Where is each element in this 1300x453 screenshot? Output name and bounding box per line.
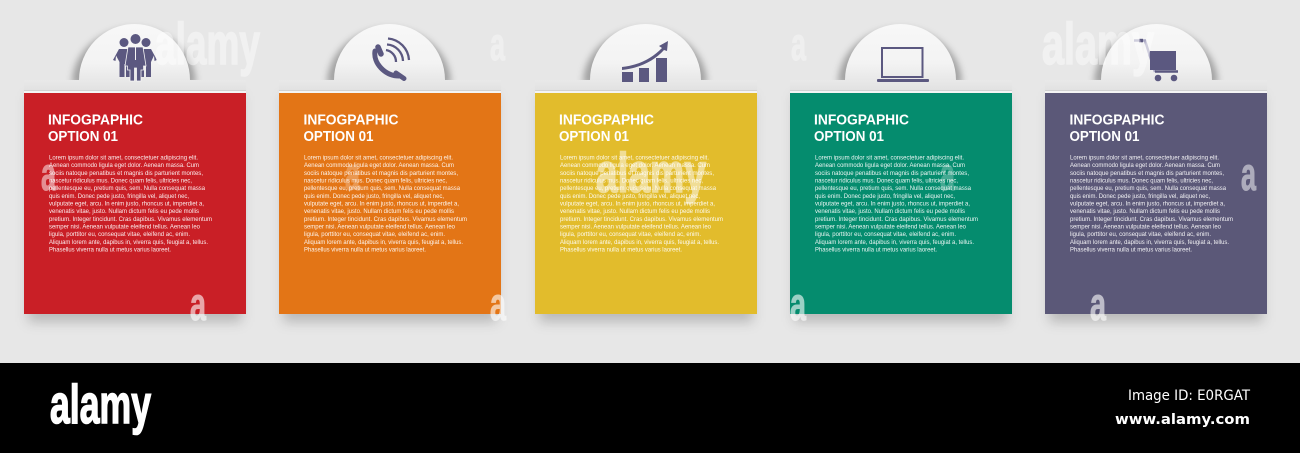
watermarks: a [490, 278, 506, 330]
body text: pellentesque eu, pretium quis, sem. Nulla consequat massa [49, 185, 205, 192]
body text: Phasellus viverra nulla ut metus varius laoreet. [560, 246, 682, 254]
body text: Aliquam lorem ante, dapibus in, viverra quis, feugiat a, tellus. [304, 239, 463, 246]
body text: venenatis vitae, justo. Nullam dictum felis eu pede mollis [304, 208, 455, 215]
body text: ligula, porttitor eu, consequat vitae, eleifend ac, enim. [815, 231, 956, 238]
body text: pellentesque eu, pretium quis, sem. Nulla consequat massa [815, 185, 971, 192]
body text: venenatis vitae, justo. Nullam dictum felis eu pede mollis [1070, 208, 1221, 215]
body text: vulputate eget, arcu. In enim justo, rhoncus ut, imperdiet a, [815, 200, 970, 208]
body text: sociis natoque penatibus et magnis dis parturient montes, [815, 170, 969, 177]
body text: vulputate eget, arcu. In enim justo, rhoncus ut, imperdiet a, [304, 200, 459, 208]
watermarks: a [345, 148, 360, 200]
body text: quis enim. Donec pede justo, fringilla vel, aliquet nec, [815, 193, 955, 200]
body text: semper nisi. Aenean vulputate eleifend tellus. Aenean leo [1070, 224, 1221, 230]
heading: OPTION 01 [559, 129, 629, 145]
heading: INFOGPAPHIC [1070, 112, 1165, 128]
heading: INFOGPAPHIC [814, 112, 910, 128]
heading: OPTION 01 [814, 129, 884, 145]
body text: quis enim. Donec pede justo, fringilla vel, aliquet nec, [49, 193, 189, 200]
heading: OPTION 01 [48, 129, 118, 145]
watermarks: a [41, 148, 56, 200]
body text [304, 154, 467, 254]
body text: Lorem ipsum dolor sit amet, consectetuer adipiscing elit. [49, 154, 198, 162]
body text: pretium. Integer tincidunt. Cras dapibus. Vivamus elementum [815, 216, 978, 223]
body text: ligula, porttitor eu, consequat vitae, eleifend ac, enim. [49, 231, 190, 238]
body text [815, 154, 978, 254]
body text: pellentesque eu, pretium quis, sem. Nulla consequat massa [304, 185, 460, 192]
body text: Lorem ipsum dolor sit amet, consectetuer adipiscing elit. [560, 154, 709, 162]
body text: nascetur ridiculus mus. Donec quam felis, ultricies nec, [560, 178, 703, 184]
body text: Phasellus viverra nulla ut metus varius laoreet. [304, 246, 426, 254]
body text: nascetur ridiculus mus. Donec quam felis, ultricies nec, [1070, 178, 1213, 184]
icon: laptop [877, 48, 929, 82]
body text: ligula, porttitor eu, consequat vitae, eleifend ac, enim. [560, 231, 701, 238]
watermarks: alamy [155, 12, 260, 77]
panel: red option [24, 24, 246, 322]
body text: Aenean commodo ligula eget dolor. Aenean massa. Cum [1070, 162, 1220, 169]
body text: Lorem ipsum dolor sit amet, consectetuer adipiscing elit. [1070, 154, 1219, 162]
body text: semper nisi. Aenean vulputate eleifend tellus. Aenean leo [49, 224, 200, 230]
heading: INFOGPAPHIC [304, 112, 399, 128]
heading: INFOGPAPHIC [48, 112, 144, 128]
body text: sociis natoque penatibus et magnis dis parturient montes, [1070, 170, 1224, 177]
footer logo: alamy [50, 373, 151, 435]
watermarks: a [940, 148, 955, 200]
body text: Aenean commodo ligula eget dolor. Aenean massa. Cum [815, 162, 965, 169]
watermarks: a [790, 278, 806, 330]
body text: pretium. Integer tincidunt. Cras dapibus. Vivamus elementum [1070, 216, 1233, 223]
image id: Image ID: E0RGAT [1128, 388, 1250, 404]
body text: quis enim. Donec pede justo, fringilla vel, aliquet nec, [1070, 193, 1210, 200]
body text: Aliquam lorem ante, dapibus in, viverra quis, feugiat a, tellus. [49, 239, 208, 246]
body text: nascetur ridiculus mus. Donec quam felis, ultricies nec, [304, 178, 447, 184]
body text: Aenean commodo ligula eget dolor. Aenean massa. Cum [560, 162, 710, 169]
body text: Aenean commodo ligula eget dolor. Aenean massa. Cum [304, 162, 454, 169]
heading: OPTION 01 [1070, 129, 1140, 145]
watermarks: alamy [1042, 12, 1154, 77]
icon: shopping cart [1134, 39, 1178, 81]
body text [49, 154, 212, 254]
body text: Lorem ipsum dolor sit amet, consectetuer adipiscing elit. [815, 154, 964, 162]
body text: venenatis vitae, justo. Nullam dictum felis eu pede mollis [815, 208, 966, 215]
body text: Phasellus viverra nulla ut metus varius laoreet. [815, 246, 937, 254]
heading [559, 112, 655, 145]
body text: sociis natoque penatibus et magnis dis parturient montes, [560, 170, 714, 177]
body text: sociis natoque penatibus et magnis dis parturient montes, [304, 170, 458, 177]
panel: green option [790, 24, 1012, 322]
body text: nascetur ridiculus mus. Donec quam felis, ultricies nec, [49, 178, 192, 184]
body text: Phasellus viverra nulla ut metus varius laoreet. [1070, 246, 1192, 254]
body text: semper nisi. Aenean vulputate eleifend tellus. Aenean leo [560, 224, 711, 230]
heading: OPTION 01 [304, 129, 374, 145]
website: www.alamy.com [1115, 412, 1250, 428]
icon: people [113, 34, 157, 81]
body text: vulputate eget, arcu. In enim justo, rhoncus ut, imperdiet a, [1070, 200, 1225, 208]
body text: Aliquam lorem ante, dapibus in, viverra quis, feugiat a, tellus. [815, 239, 974, 246]
body text: vulputate eget, arcu. In enim justo, rhoncus ut, imperdiet a, [49, 200, 204, 208]
body text: pretium. Integer tincidunt. Cras dapibus. Vivamus elementum [304, 216, 467, 223]
heading [1070, 112, 1165, 145]
body text: Aenean commodo ligula eget dolor. Aenean massa. Cum [49, 162, 199, 169]
body text: Aliquam lorem ante, dapibus in, viverra quis, feugiat a, tellus. [1070, 239, 1229, 246]
heading [304, 112, 399, 145]
panel: orange option [279, 24, 501, 322]
watermarks: a [1090, 278, 1106, 330]
body text: ligula, porttitor eu, consequat vitae, eleifend ac, enim. [1070, 231, 1211, 238]
heading: INFOGPAPHIC [559, 112, 655, 128]
body text: semper nisi. Aenean vulputate eleifend tellus. Aenean leo [815, 224, 966, 230]
watermarks: a [490, 18, 505, 70]
body text: pretium. Integer tincidunt. Cras dapibus. Vivamus elementum [49, 216, 212, 223]
body text: pretium. Integer tincidunt. Cras dapibus. Vivamus elementum [560, 216, 723, 223]
body text: quis enim. Donec pede justo, fringilla vel, aliquet nec, [304, 193, 444, 200]
body text: venenatis vitae, justo. Nullam dictum felis eu pede mollis [49, 208, 200, 215]
body text: Aliquam lorem ante, dapibus in, viverra quis, feugiat a, tellus. [560, 239, 719, 246]
body text: ligula, porttitor eu, consequat vitae, eleifend ac, enim. [304, 231, 445, 238]
body text: pellentesque eu, pretium quis, sem. Nulla consequat massa [1070, 185, 1226, 192]
watermarks: a [1241, 148, 1256, 200]
body text: nascetur ridiculus mus. Donec quam felis, ultricies nec, [815, 178, 958, 184]
heading [48, 112, 144, 145]
body text: sociis natoque penatibus et magnis dis parturient montes, [49, 170, 203, 177]
icon: phone [375, 38, 409, 78]
heading [814, 112, 910, 145]
body text: pellentesque eu, pretium quis, sem. Nulla consequat massa [560, 185, 716, 192]
icon: growth chart [622, 41, 668, 82]
footer bar [0, 363, 1300, 453]
body text: Lorem ipsum dolor sit amet, consectetuer adipiscing elit. [304, 154, 453, 162]
body text: Phasellus viverra nulla ut metus varius laoreet. [49, 246, 171, 254]
body text: venenatis vitae, justo. Nullam dictum felis eu pede mollis [560, 208, 711, 215]
body text: semper nisi. Aenean vulputate eleifend tellus. Aenean leo [304, 224, 455, 230]
body text [560, 154, 723, 254]
panel: yellow option [535, 24, 757, 322]
body text: vulputate eget, arcu. In enim justo, rhoncus ut, imperdiet a, [560, 200, 715, 208]
panel: purple option [1045, 24, 1267, 322]
watermarks: alamy [596, 141, 706, 204]
body text: quis enim. Donec pede justo, fringilla vel, aliquet nec, [560, 193, 700, 200]
body text [1070, 154, 1233, 254]
watermarks [41, 12, 1256, 330]
watermarks: a [791, 18, 806, 70]
watermarks: a [190, 278, 206, 330]
